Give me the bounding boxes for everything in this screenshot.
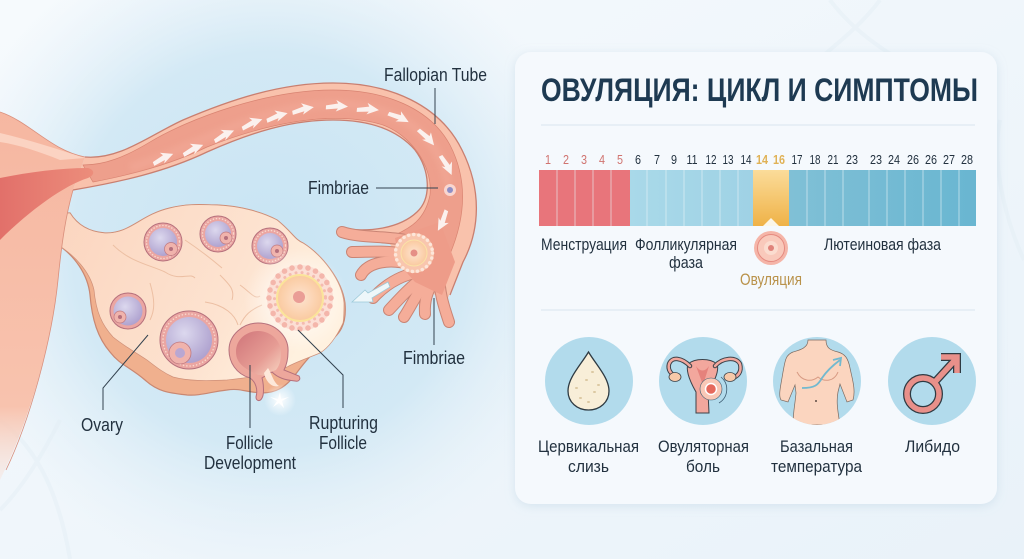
symptom: ovulation pain: Овуляторная xyxy=(658,437,749,456)
symptom: cervical mucus: слизь xyxy=(568,457,609,476)
phase label: menstruation: Менструация xyxy=(541,236,627,254)
day numbers: 23 xyxy=(870,152,882,167)
follicle 1 xyxy=(144,223,182,261)
leader lines xyxy=(103,88,438,428)
release arrow xyxy=(352,282,390,302)
label: Fimbriae lower: Fimbriae xyxy=(403,348,465,368)
day numbers: 12 xyxy=(706,152,716,167)
day numbers xyxy=(545,152,973,167)
ovulating follicle glow xyxy=(244,248,348,352)
symptom: libido: Либидо xyxy=(905,437,960,456)
day numbers: 5 xyxy=(617,152,623,167)
symptom: cervical mucus: Цервикальная xyxy=(538,437,639,456)
follicle 5 xyxy=(160,311,218,369)
symptom: ovulation pain: боль xyxy=(686,457,720,476)
symptom: libido xyxy=(888,337,976,456)
label: Rupturing Follicle: Follicle xyxy=(319,433,367,453)
sparkle xyxy=(264,384,296,416)
day numbers: 27 xyxy=(943,152,955,167)
day numbers: 2 xyxy=(563,152,569,167)
fertilized cell xyxy=(444,184,456,196)
ovulating follicle xyxy=(267,265,333,331)
phase label: follicular: Фолликулярная xyxy=(635,236,737,254)
cycle bar xyxy=(539,170,976,226)
day numbers: 21 xyxy=(828,152,838,167)
label: Rupturing Follicle xyxy=(309,413,378,453)
fallopian tube xyxy=(0,83,476,305)
day numbers: 23 xyxy=(846,152,858,167)
day numbers: 14 xyxy=(740,152,752,167)
day numbers: 24 xyxy=(888,152,900,167)
day numbers: 18 xyxy=(810,152,820,167)
phase label: follicular: фаза xyxy=(669,254,704,272)
uterus xyxy=(0,112,85,480)
label: Fallopian Tube: Fallopian Tube xyxy=(384,65,487,85)
transport arrows xyxy=(151,99,457,234)
day numbers: 28 xyxy=(961,152,973,167)
symptom: basal temperature: Базальная xyxy=(780,437,853,456)
ruptured follicle xyxy=(229,323,300,401)
phase label: follicular xyxy=(635,236,737,272)
symptom: basal temperature xyxy=(771,337,862,476)
fimbriae fingers xyxy=(342,222,455,322)
day numbers: 17 xyxy=(792,152,802,167)
label: Ovary: Ovary xyxy=(81,415,123,435)
day numbers: 4 xyxy=(599,152,605,167)
phase label: luteal: Лютеиновая фаза xyxy=(824,236,942,254)
day numbers: 13 xyxy=(722,152,734,167)
day numbers: 7 xyxy=(654,152,660,167)
panel: cycle and symptoms xyxy=(515,52,997,504)
day numbers: 16 xyxy=(773,152,785,167)
follicle 4 xyxy=(110,293,146,329)
reproductive anatomy illustration xyxy=(0,83,476,480)
phase label: ovulation: Овуляция xyxy=(740,271,802,289)
day numbers: 6 xyxy=(635,152,641,167)
ovary xyxy=(55,205,345,395)
day numbers: 26 xyxy=(907,152,919,167)
label: Follicle Development: Follicle xyxy=(226,433,273,453)
day numbers: 3 xyxy=(581,152,587,167)
symptom: basal temperature: температура xyxy=(771,457,862,476)
follicle 3 xyxy=(252,228,288,264)
ovum in fimbriae xyxy=(394,233,434,273)
day numbers: 14 xyxy=(756,152,769,167)
symptom: ovulation pain xyxy=(658,337,749,476)
label: Follicle Development xyxy=(204,433,296,473)
icon: ovum xyxy=(754,231,788,265)
day numbers: 1 xyxy=(545,152,551,167)
follicle 2 xyxy=(200,216,236,252)
symptom: cervical mucus xyxy=(538,337,639,476)
day numbers: 11 xyxy=(686,152,698,167)
label: Fimbriae upper: Fimbriae xyxy=(308,178,369,198)
day numbers: 26 xyxy=(925,152,937,167)
day numbers: 9 xyxy=(671,152,677,167)
label: Follicle Development: Development xyxy=(204,453,296,473)
label: Rupturing Follicle: Rupturing xyxy=(309,413,378,433)
